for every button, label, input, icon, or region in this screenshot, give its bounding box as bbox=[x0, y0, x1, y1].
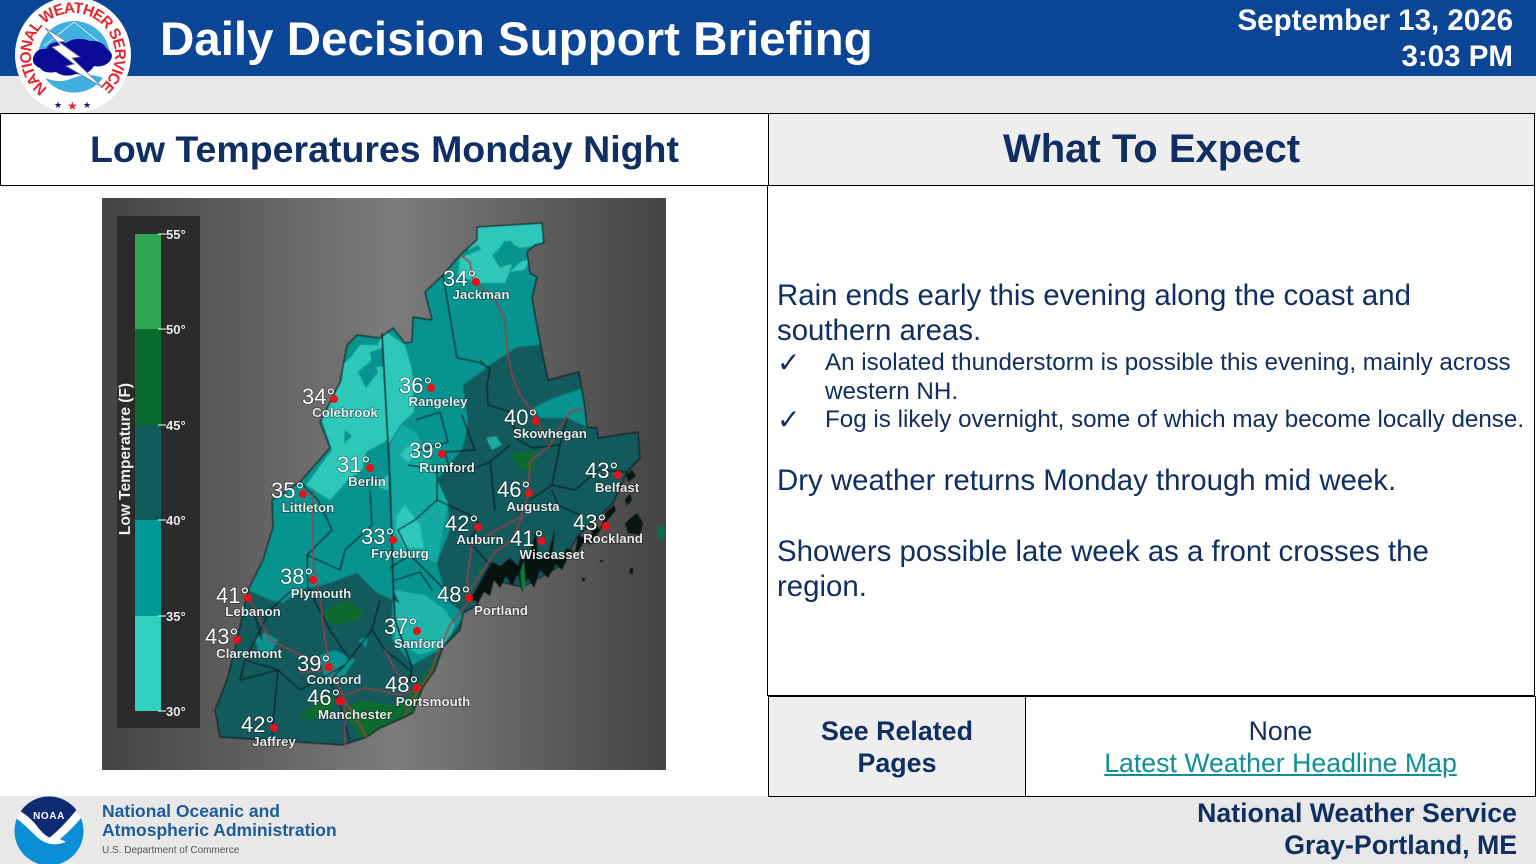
city forecasts: 48° bbox=[385, 672, 418, 697]
city forecasts: 31° bbox=[337, 452, 370, 477]
city forecasts: Portland bbox=[474, 603, 528, 618]
panel: map heading bbox=[0, 113, 769, 186]
panel: related links: Latest Weather Headline Map bbox=[1104, 748, 1457, 778]
panel: related links: None bbox=[1249, 716, 1312, 746]
city forecasts: 34° bbox=[443, 266, 476, 291]
checkmark: ✓ bbox=[777, 403, 800, 436]
city forecasts: Rockland bbox=[583, 531, 643, 546]
office name bbox=[1197, 798, 1517, 860]
showers paragraph: Showers possible late week as a front crosses the bbox=[777, 535, 1429, 568]
city forecasts: Fryeburg bbox=[371, 546, 429, 561]
city forecasts: Wiscasset bbox=[520, 547, 585, 562]
dry weather line: Dry weather returns Monday through mid week. bbox=[777, 464, 1396, 497]
city forecasts: 39° bbox=[409, 438, 442, 463]
city forecasts: Rangeley bbox=[408, 394, 468, 409]
dark area central and coastal Maine bbox=[437, 345, 640, 613]
legend: 50° bbox=[166, 322, 186, 337]
rain paragraph: southern areas. bbox=[777, 314, 981, 347]
city forecasts: Concord bbox=[307, 672, 361, 687]
icon: NWS logo: ★ bbox=[83, 100, 91, 110]
city forecasts: 46° bbox=[497, 477, 530, 502]
legend: 45° bbox=[166, 418, 186, 433]
city forecasts: 40° bbox=[504, 405, 537, 430]
city forecasts: 46° bbox=[307, 685, 340, 710]
green warm patches bbox=[300, 450, 535, 740]
map: New Hampshire and Maine temperature regions bbox=[200, 215, 665, 770]
city forecasts: Manchester bbox=[318, 707, 392, 722]
thunderstorm bullet: An isolated thunderstorm is possible this evening, mainly across bbox=[825, 349, 1511, 376]
dark area southern NH and Maine bbox=[216, 572, 462, 745]
city forecasts: Auburn bbox=[456, 532, 504, 547]
city forecasts: 43° bbox=[585, 458, 618, 483]
city forecasts: 41° bbox=[510, 526, 543, 551]
date and time: 3:03 PM bbox=[1402, 40, 1513, 73]
city forecasts: 35° bbox=[271, 478, 304, 503]
city forecasts: Jaffrey bbox=[252, 734, 296, 749]
panel: what to expect heading bbox=[768, 113, 1535, 186]
roads bbox=[250, 255, 585, 745]
legend bbox=[117, 216, 200, 728]
panel: related links bbox=[1025, 696, 1536, 797]
office name: Gray-Portland, ME bbox=[1284, 830, 1517, 860]
date and time: September 13, 2026 bbox=[1238, 4, 1513, 37]
city forecasts bbox=[205, 266, 643, 749]
icon: NOAA logo: NOAA bbox=[33, 811, 65, 822]
NOAA wordmark: Atmospheric Administration bbox=[102, 820, 337, 840]
rain paragraph bbox=[777, 279, 1411, 347]
NOAA wordmark: National Oceanic and bbox=[102, 801, 280, 821]
title: Daily Decision Support Briefing bbox=[160, 13, 873, 66]
icon: NWS logo: NATIONAL WEATHER SERVICE bbox=[20, 2, 126, 96]
city forecasts: Skowhegan bbox=[513, 426, 587, 441]
legend: 40° bbox=[166, 513, 186, 528]
checkmark: ✓ bbox=[777, 346, 800, 379]
city forecasts: 43° bbox=[205, 624, 238, 649]
icon: NWS logo: ★ bbox=[67, 99, 78, 113]
city forecasts: Rumford bbox=[419, 460, 475, 475]
panel: what to expect heading: What To Expect bbox=[1003, 127, 1300, 171]
panel: see related pages label: Pages bbox=[858, 748, 936, 778]
city forecasts: 41° bbox=[216, 583, 249, 608]
city forecasts: Plymouth bbox=[291, 586, 351, 601]
city forecasts: Portsmouth bbox=[396, 694, 470, 709]
department of commerce: U.S. Department of Commerce bbox=[102, 845, 239, 856]
city forecasts: Belfast bbox=[595, 480, 640, 495]
city forecasts: Lebanon bbox=[225, 604, 281, 619]
city forecasts: 38° bbox=[280, 564, 313, 589]
northern Maine light patches bbox=[468, 223, 544, 254]
coastal islands bbox=[470, 505, 616, 603]
city forecasts: 36° bbox=[399, 373, 432, 398]
city forecasts: Jackman bbox=[453, 287, 509, 302]
city forecasts: Littleton bbox=[282, 500, 334, 515]
NH and western Maine light area bbox=[306, 330, 414, 500]
icon: NOAA logo bbox=[14, 796, 84, 864]
city forecasts: Sanford bbox=[394, 636, 444, 651]
showers paragraph bbox=[777, 535, 1429, 603]
city forecasts: Berlin bbox=[348, 474, 386, 489]
city forecasts: Colebrook bbox=[312, 405, 378, 420]
city forecasts: Augusta bbox=[506, 499, 560, 514]
panel: what to expect text bbox=[767, 185, 1535, 696]
footer bar bbox=[0, 796, 1536, 864]
grey band below header bbox=[0, 76, 1536, 113]
legend: 30° bbox=[166, 704, 186, 719]
header bar bbox=[0, 0, 1536, 76]
chart: low temperature map bbox=[102, 198, 666, 770]
city forecasts: Claremont bbox=[216, 646, 282, 661]
thunderstorm bullet: western NH. bbox=[825, 378, 958, 405]
city forecasts: 43° bbox=[573, 510, 606, 535]
date and time bbox=[1238, 4, 1513, 73]
legend: Low Temperature (F) bbox=[117, 383, 134, 535]
panel: see related pages label: See Related bbox=[821, 716, 973, 746]
city forecasts: 37° bbox=[384, 614, 417, 639]
city forecasts: 39° bbox=[297, 651, 330, 676]
county and state boundaries bbox=[382, 333, 412, 682]
thunderstorm bullet bbox=[825, 349, 1511, 405]
city forecasts: 42° bbox=[445, 511, 478, 536]
office name: National Weather Service bbox=[1197, 798, 1517, 828]
city forecasts: 42° bbox=[241, 712, 274, 737]
city forecasts: 33° bbox=[361, 524, 394, 549]
NOAA wordmark bbox=[102, 801, 337, 840]
icon: NWS logo: ★ bbox=[54, 100, 62, 110]
city forecasts: 34° bbox=[302, 384, 335, 409]
panel: map heading: Low Temperatures Monday Night bbox=[90, 128, 679, 170]
panel: see related pages label bbox=[768, 696, 1026, 797]
city forecasts: 48° bbox=[437, 582, 470, 607]
fog bullet: Fog is likely overnight, some of which may become locally dense. bbox=[825, 406, 1524, 433]
showers paragraph: region. bbox=[777, 570, 867, 603]
rain paragraph: Rain ends early this evening along the coast and bbox=[777, 279, 1411, 312]
legend: 35° bbox=[166, 609, 186, 624]
legend: 55° bbox=[166, 227, 186, 242]
